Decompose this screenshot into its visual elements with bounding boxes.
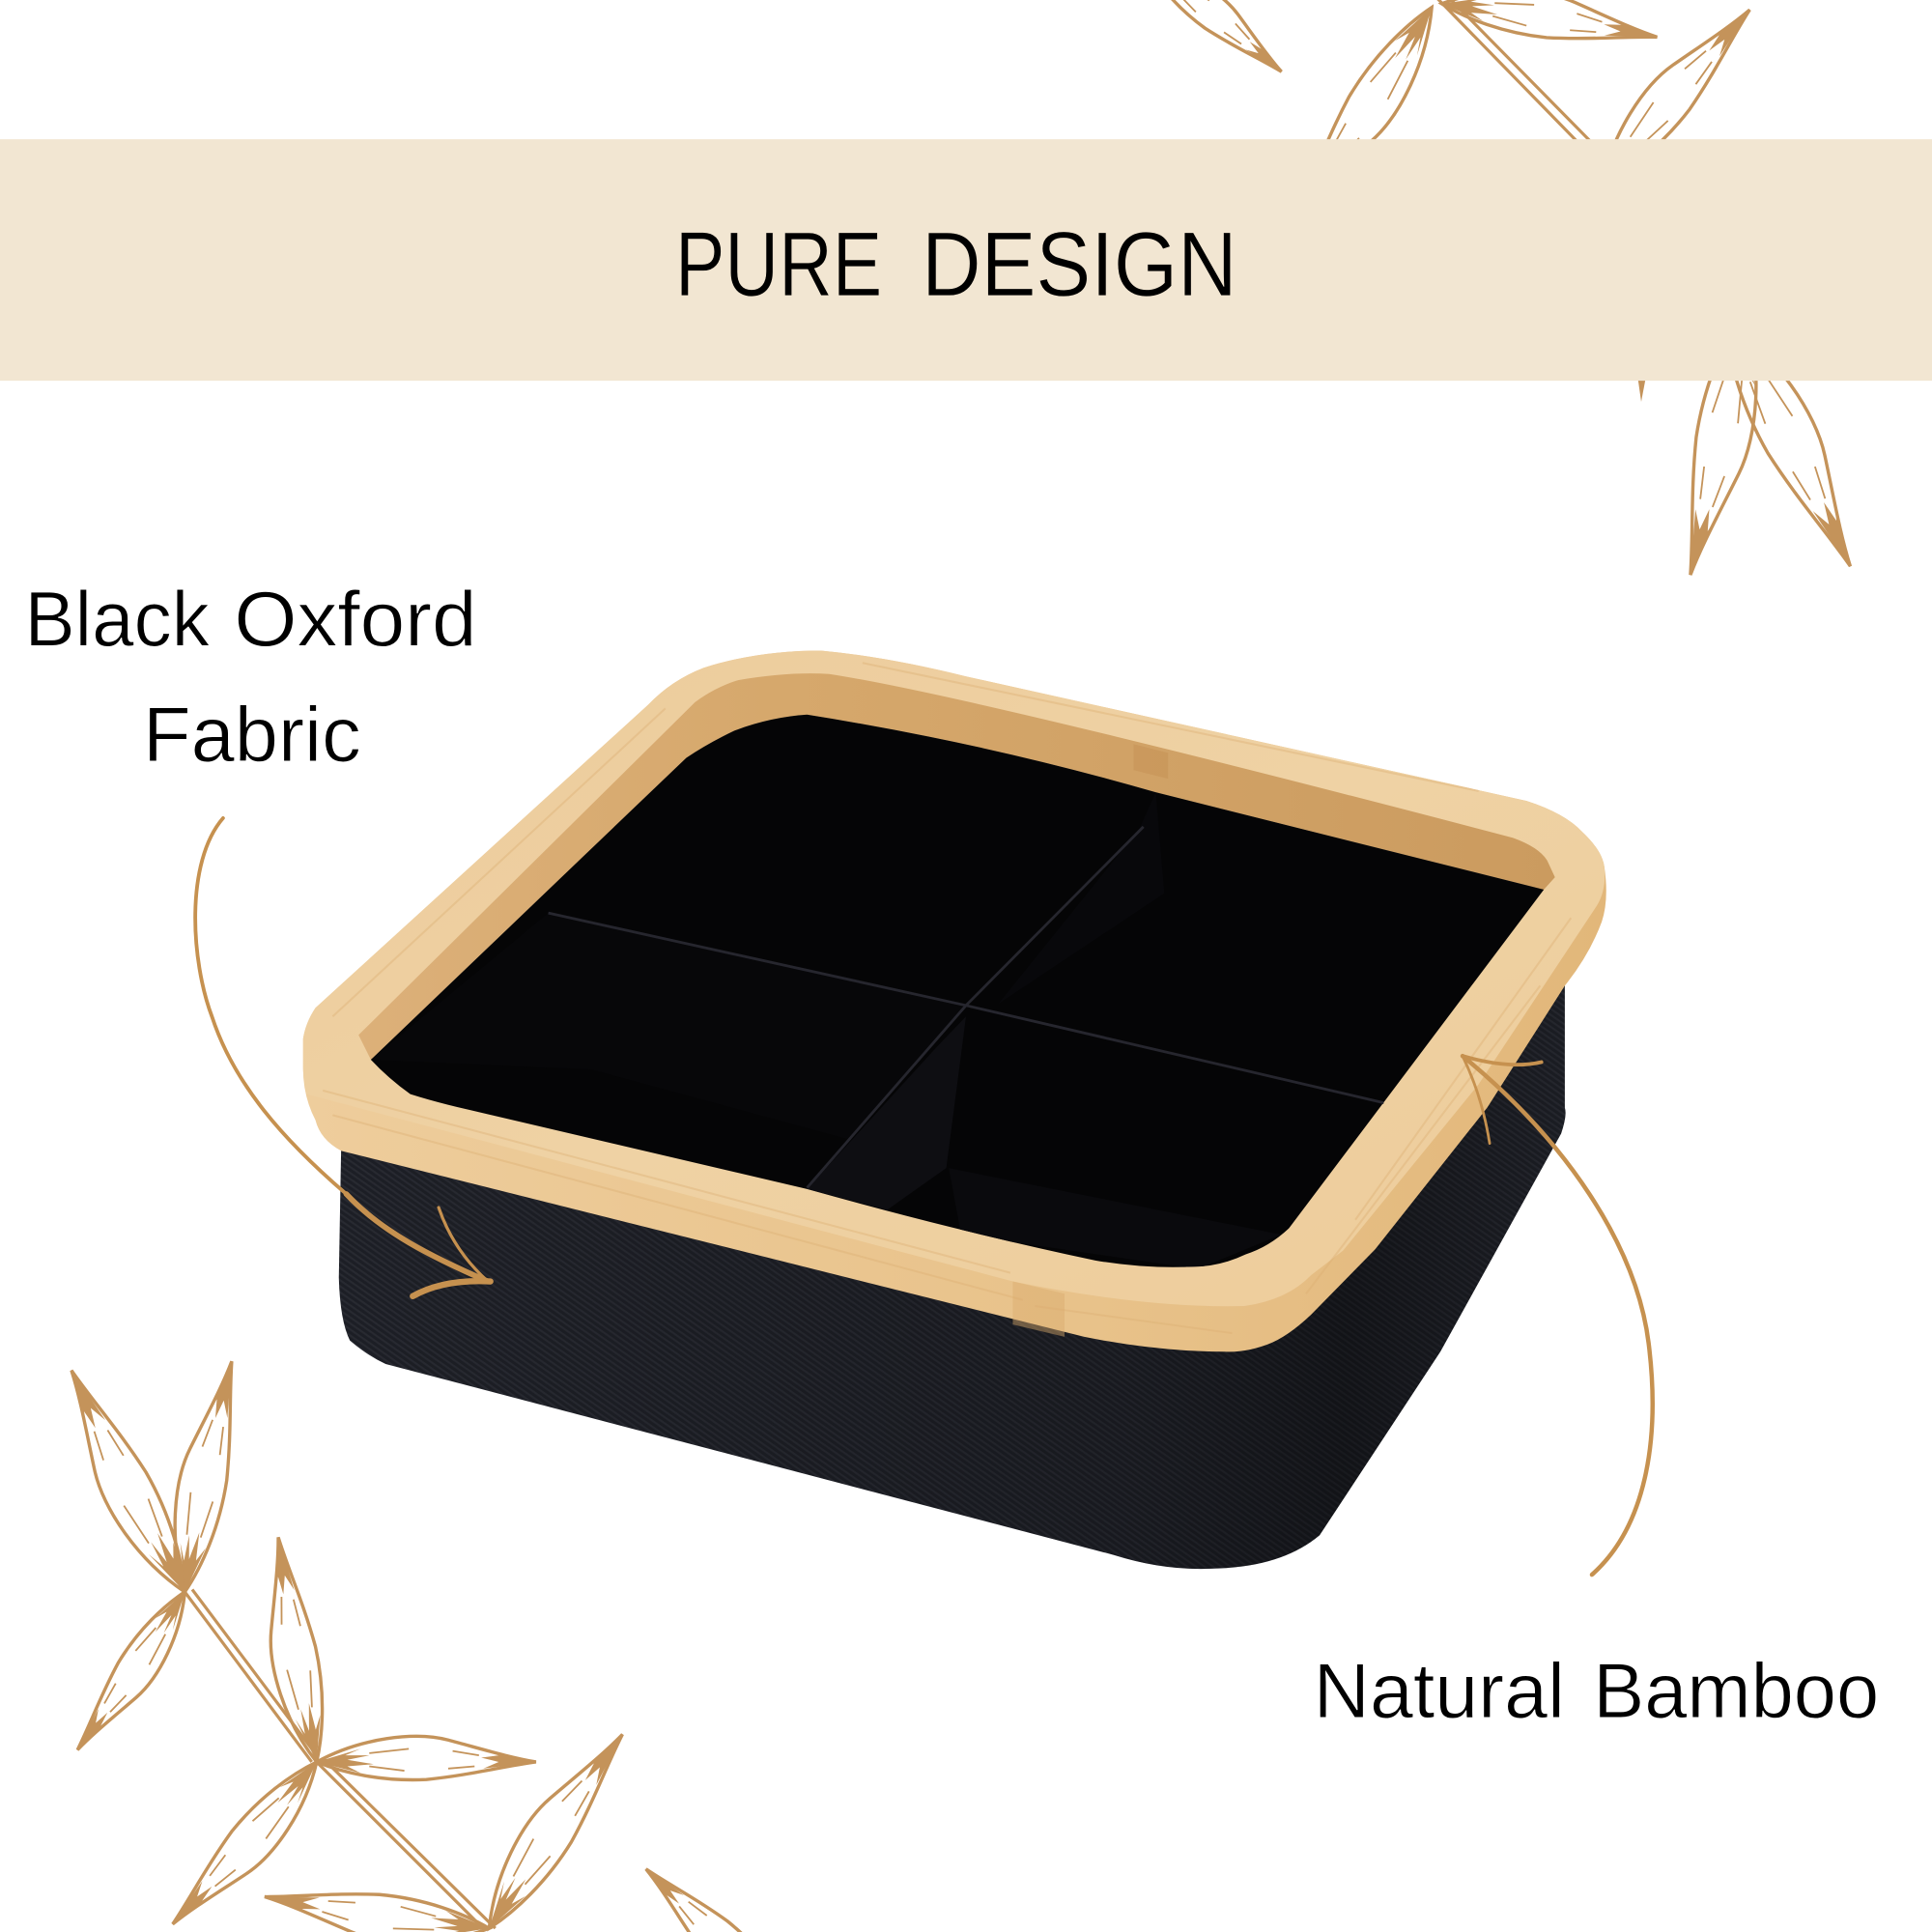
label: black oxford fabric: Fabric bbox=[143, 692, 361, 779]
title banner bbox=[0, 139, 1932, 381]
compartment shading bbox=[371, 1017, 1206, 1267]
bamboo grain and joints bbox=[323, 663, 1571, 1337]
label: black oxford fabric: Black bbox=[25, 576, 211, 663]
fabric dividers bbox=[549, 827, 1383, 1188]
decorative bamboo leaves: top right bbox=[1137, 0, 1879, 582]
label: natural bamboo: Bamboo bbox=[1593, 1648, 1879, 1735]
title: PURE bbox=[675, 214, 882, 316]
arrow: to natural bamboo bbox=[1463, 1056, 1653, 1575]
label: black oxford fabric bbox=[25, 576, 477, 779]
label: natural bamboo: Natural bbox=[1314, 1648, 1565, 1735]
bamboo rim outer bbox=[303, 650, 1606, 1351]
arrow: to black oxford fabric bbox=[195, 818, 491, 1296]
rim inner wall bbox=[358, 673, 1555, 1060]
product: bamboo and fabric basket bbox=[303, 650, 1606, 1569]
basket fabric body bbox=[339, 974, 1566, 1569]
interior fabric bbox=[371, 715, 1544, 1267]
label: black oxford fabric: Oxford bbox=[234, 576, 477, 663]
decorative bamboo leaves: bottom left bbox=[45, 1356, 799, 1932]
bamboo rim top surface bbox=[303, 650, 1605, 1306]
title: DESIGN bbox=[922, 214, 1237, 316]
